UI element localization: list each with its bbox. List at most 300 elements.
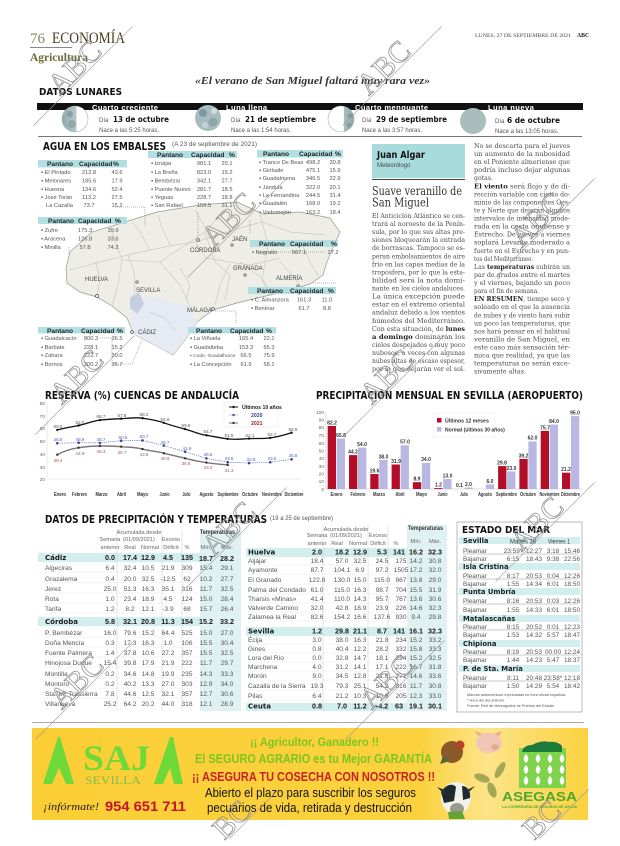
month labels: Septiembre (496, 492, 517, 498)
month labels: Abril (117, 492, 126, 498)
table: Tranco de Beas group: 18.4 (329, 210, 341, 216)
table: Cadiz and Cordoba: 6.4 (105, 565, 115, 572)
table: Iznájar group: ▪ San Rafael (151, 203, 183, 209)
advert slogans: Abierto el plazo para suscribir los seguros (205, 785, 416, 800)
table: Tranco de Beas group: 22.9 (329, 176, 341, 182)
month labels: Febrero (350, 492, 366, 498)
table: Iznájar group: 31.1 (221, 203, 233, 209)
watermark: ABC pattern: ABC (503, 186, 570, 253)
bar chart: 20 (319, 472, 324, 478)
table: Huelva, Sevilla and Ceuta: 0.0 (312, 655, 322, 662)
panel: estado del mar: 20:53 (526, 649, 542, 656)
moon dates: 21 de septiembre (245, 115, 316, 124)
table: Cadiz and Cordoba: 27.2 (162, 650, 175, 657)
series: 2020: 50.5 (119, 435, 128, 440)
table: Huelva reservoirs: 134.6 (82, 187, 96, 193)
article text right column: El viento será flojo y de di- (474, 183, 570, 190)
table: Huelva, Sevilla and Ceuta: 29.8 (335, 626, 349, 636)
heading: datos de precipitacion y temperaturas: (19 a 25 de septiembre) (270, 515, 333, 522)
series: 2020: 32.8 (247, 457, 256, 462)
table: Cadiz and Cordoba: 32.1 (123, 617, 137, 626)
table: Huelva, Sevilla and Ceuta: 12.3 (410, 693, 423, 700)
table: Cadiz and Cordoba: 33.2 (220, 617, 234, 626)
table: Iznájar group: ▪ Puente Nuevo (151, 187, 191, 193)
table: Almanzora group: 61.7 (298, 306, 310, 312)
line chart (40, 401, 304, 498)
table: Cadiz and Cordoba: 25.0 (104, 586, 117, 593)
article text left column: sula, por lo que sus altas pre- (372, 229, 465, 236)
heading: agua en los embalses: AGUA EN LOS EMBALSES (43, 140, 166, 153)
table: La Viñuela group: ▪ La Concepción (190, 362, 232, 368)
table: La Viñuela group: 61.9 (240, 362, 252, 368)
table: Huelva, Sevilla and Ceuta: 21.1 (353, 626, 367, 636)
table: Huelva, Sevilla and Ceuta: 17.2 (410, 567, 423, 574)
page header (30, 30, 589, 64)
table: Cadiz and Cordoba: 19.9 (162, 671, 175, 678)
table: Cadiz and Cordoba: 64.2 (124, 701, 137, 708)
author box (372, 144, 465, 180)
table: Cadiz and Cordoba: 316 (181, 586, 193, 593)
article text right column: gotas. (474, 175, 493, 182)
table: Huelva reservoirs: % (113, 161, 119, 168)
series: 2021: 43.8 (140, 452, 149, 457)
panel: estado del mar: 1:55 (507, 581, 520, 588)
panel: estado del mar: 20:48 (526, 675, 542, 682)
panel: estado del mar: 0:01 (547, 624, 560, 631)
month labels: Diciembre (284, 492, 304, 498)
series: ultimos 10 anos: 59.0 (54, 424, 63, 429)
bar chart (316, 410, 582, 498)
table: Cadiz and Cordoba: 62 (183, 576, 191, 583)
table: Cadiz and Cordoba: 15.5 (200, 650, 213, 657)
black moon band: Luna nueva (488, 103, 535, 112)
series: ultimos 10 anos: 66.7 (97, 414, 106, 419)
table: Huelva reservoirs: ▪ José Torán (41, 195, 72, 201)
bar value labels: 23.0 (507, 466, 517, 472)
bar value labels: 8.9 (414, 476, 421, 482)
panel: estado del mar: Bajamar (463, 632, 488, 639)
series: 2020: 41.8 (183, 446, 192, 451)
table: Cadiz and Cordoba: 79.6 (124, 630, 137, 637)
table: Cadiz and Cordoba: 12.9 (141, 553, 155, 562)
table: Guadalcacín group: 36.5 (111, 336, 123, 342)
bar chart: 100 (316, 410, 324, 416)
column headers: Déficit (370, 541, 386, 547)
table: Iznájar group: ▪ Yeguas (151, 195, 173, 201)
table: Huelva, Sevilla and Ceuta: 15.8 (410, 646, 423, 653)
table: Zufre group (38, 217, 127, 251)
series: 2021: 31.3 (225, 468, 234, 473)
table: Huelva, Sevilla and Ceuta: 224 (395, 655, 407, 662)
table: Huelva, Sevilla and Ceuta: Palma del Condado (248, 587, 306, 594)
icon: moon first quarter (62, 106, 88, 132)
line chart: 70 (40, 414, 45, 420)
series: 2020: 36.5 (204, 452, 213, 457)
table: Cadiz and Cordoba: 29.1 (221, 565, 234, 572)
panel: estado del mar: Pleamar (463, 548, 488, 555)
panel: estado del mar: 18:47 (564, 632, 580, 639)
series: ultimos 10 anos: 56.8 (289, 427, 298, 432)
series: 2021: 39.4 (54, 458, 63, 463)
table: Cadiz and Cordoba: 10.2 (200, 576, 213, 583)
table: Huelva, Sevilla and Ceuta: 32.8 (336, 655, 349, 662)
heading: estado del mar: ESTADO DEL MAR (462, 525, 551, 536)
bar chart: 10 (319, 479, 324, 485)
table: Iznájar group: 823.0 (197, 170, 211, 176)
bar chart: 70 (319, 433, 324, 439)
map of Andalucia: ALMERÍA (276, 275, 302, 282)
table: Cadiz and Cordoba: 222 (181, 660, 193, 667)
table: Cadiz and Cordoba: 525 (181, 630, 193, 637)
table: Zufre group: 126.8 (78, 236, 92, 242)
table: Cadiz and Cordoba: 124 (181, 596, 193, 603)
table: Cadiz and Cordoba: 44.6 (124, 691, 137, 698)
panel: estado del mar: 12:18 (564, 675, 580, 682)
table: Huelva, Sevilla and Ceuta: 32.3 (428, 626, 442, 636)
panel: estado del mar: P. de Sta. María (463, 665, 523, 673)
logo: Asegasa: ASEGASA (502, 789, 578, 804)
table: Huelva, Sevilla and Ceuta: 34.5 (336, 673, 349, 680)
table: Zufre group: 39.9 (107, 228, 119, 234)
series: 2021: 36.6 (182, 461, 191, 466)
table: Cadiz and Cordoba: 11.7 (200, 586, 213, 593)
table: Almanzora group: % (328, 288, 334, 295)
table: Huelva, Sevilla and Ceuta: 4.0 (312, 664, 322, 671)
table: Iznájar group: 20.1 (221, 161, 233, 167)
table: Huelva, Sevilla and Ceuta: 54.2 (376, 683, 389, 690)
table: Cadiz and Cordoba: 13.3 (142, 681, 155, 688)
table: Zufre group: ▪ Aracena (41, 236, 66, 242)
table: Cadiz and Cordoba: 30.6 (221, 691, 234, 698)
table: Cadiz and Cordoba: 51.3 (124, 586, 137, 593)
moon dates: Día (362, 118, 372, 124)
bar value labels: 38.0 (379, 454, 389, 460)
watermark: ABC pattern: ABC (350, 34, 417, 101)
table: Huelva, Sevilla and Ceuta: 316 (395, 683, 407, 690)
bar chart: 40 (319, 456, 324, 462)
table: Cadiz and Cordoba: -12.5 (160, 576, 176, 583)
table: Huelva reservoirs: 113.2 (82, 195, 96, 201)
table: La Viñuela group: % (266, 328, 272, 335)
panel: estado del mar: 15:46 (564, 548, 580, 555)
table: Cadiz and Cordoba: 32.1 (162, 691, 175, 698)
port bands (459, 537, 580, 672)
bar value labels: 75.7 (540, 426, 550, 432)
logo: ASAJA Sevilla (43, 737, 183, 787)
table: Cadiz and Cordoba: 14.8 (142, 671, 155, 678)
table: Cadiz and Cordoba: Fuente Palmera (45, 650, 92, 657)
table: Iznájar group: 228.7 (197, 195, 211, 201)
table: Cadiz and Cordoba: 1.4 (105, 650, 115, 657)
panel: estado del mar: Bajamar (463, 657, 488, 664)
table: Huelva, Sevilla and Ceuta: 32.3 (428, 548, 442, 556)
watermark: ABC pattern: BC (206, 794, 258, 846)
table: La Viñuela group: ▪ Guadalteba (190, 345, 224, 351)
table: Iznájar group: 281.7 (197, 187, 211, 193)
article heading: Suave veranillo de (372, 184, 462, 198)
table: Guadalcacín group: Pantano (47, 328, 73, 335)
table: Negratín (250, 240, 339, 256)
table: Huelva, Sevilla and Ceuta: Marchena (248, 664, 278, 671)
panel: estado del mar: Bajamar (463, 581, 488, 588)
article text right column: Estrecho. De jueves a viernes (474, 232, 570, 239)
table: Huelva, Sevilla and Ceuta: 0.8 (312, 646, 322, 653)
table: Cadiz and Cordoba: 0.0 (105, 553, 115, 562)
table: Cadiz and Cordoba: 17.9 (142, 660, 155, 667)
table: Almanzora group: 11.0 (322, 298, 332, 304)
table: Tranco de Beas group: % (335, 151, 341, 158)
table: Cadiz and Cordoba: 0.2 (105, 681, 115, 688)
article text right column: tos del Mediterráneo. (474, 256, 533, 263)
table: Huelva, Sevilla and Ceuta: 115.0 (334, 587, 350, 594)
table: Cadiz and Cordoba: 28.2 (220, 554, 234, 563)
tide notes: Fuente: Red de Mareógrafos de Puertos del Estado (467, 704, 554, 708)
table: Cadiz and Cordoba: 318 (181, 701, 193, 708)
table: Huelva, Sevilla and Ceuta: 15.5 (410, 587, 423, 594)
panel: bar chart precipitation (316, 389, 583, 498)
table: Cadiz and Cordoba: 68 (183, 606, 191, 613)
series: 2020: 33.5 (225, 456, 234, 461)
moon dates: 6 de octubre (507, 116, 560, 125)
table: Guadalcacín group: 30.0 (111, 353, 123, 359)
table: Cadiz and Cordoba: 106 (181, 640, 193, 647)
bar value labels: 54.0 (357, 442, 367, 448)
moon dates: Nace a las 3:57 horas. (362, 128, 422, 134)
table: Huelva reservoirs: 212.8 (82, 170, 96, 176)
table: Huelva, Sevilla and Ceuta: 16.2 (409, 548, 423, 556)
table: Huelva, Sevilla and Ceuta: 141 (393, 548, 405, 556)
panel: estado del mar: Pleamar (463, 573, 488, 580)
table: Cadiz and Cordoba: 7.8 (105, 691, 115, 698)
table: Huelva, Sevilla and Ceuta: Cazalla de la Sierra (248, 683, 306, 690)
table: Huelva reservoirs: 52.4 (111, 187, 123, 193)
table: Zufre group: Capacidad (78, 218, 111, 225)
table: Cadiz and Cordoba: Grazalema (45, 576, 78, 583)
table: Cadiz and Cordoba: -3.9 (162, 606, 174, 613)
tide notes (467, 693, 566, 708)
article text left column: troposfera, por lo que la esta- (372, 269, 465, 276)
table: Cadiz and Cordoba: 27.0 (221, 630, 234, 637)
table: Almanzora group: Capacidad (290, 288, 323, 295)
legend (433, 413, 505, 437)
table: Cadiz and Cordoba: 1.0 (163, 640, 173, 647)
table: Huelva, Sevilla and Ceuta: 205 (395, 693, 407, 700)
table: Cadiz and Cordoba: Sta. Mª Trassierra (45, 691, 98, 698)
panel: estado del mar: Pleamar (463, 598, 488, 605)
table: Huelva, Sevilla and Ceuta: 12.2 (354, 646, 367, 653)
bar value labels: 82.2 (327, 420, 337, 426)
map of Andalucia: SEVILLA (136, 288, 160, 294)
month labels: Junio (160, 492, 170, 498)
logo: Asegasa: LA CORREDURÍA DE SEGUROS DE ASAJA (502, 804, 577, 809)
table: Huelva, Sevilla and Ceuta: 332 (395, 646, 407, 653)
table: Huelva, Sevilla and Ceuta: 38.0 (336, 637, 349, 644)
table: Cadiz and Cordoba: Hinojosa Duque (45, 660, 92, 667)
icon: moon last quarter (328, 106, 354, 132)
bar value labels: 84.0 (549, 419, 559, 425)
table: Huelva, Sevilla and Ceuta: Pilas (248, 693, 263, 700)
table: Cadiz and Cordoba: 4.5 (163, 553, 173, 562)
table: Cadiz and Cordoba: 64.4 (162, 630, 175, 637)
table: Huelva, Sevilla and Ceuta: Sevilla (248, 628, 275, 636)
advert: ASAJA Sevilla (32, 728, 588, 820)
article text right column: veranillo de San Miguel, en (473, 336, 570, 343)
month labels: Julio (460, 492, 468, 498)
article text right column: en el Poniente almeriense que (474, 159, 570, 166)
article text left column: de borrascas. Tampoco se es- (372, 245, 465, 252)
table: La Viñuela group: 153.3 (239, 345, 253, 351)
series: ultimos 10 anos: 52.7 (268, 432, 277, 437)
table: La Viñuela group: 66.5 (240, 353, 252, 359)
table: Huelva, Sevilla and Ceuta: 32.0 (311, 605, 324, 612)
table: Cadiz and Cordoba: 303 (181, 681, 193, 688)
panel: estado del mar: Chipiona (463, 640, 497, 648)
table: Almanzora group: Pantano (257, 288, 283, 295)
panel: estado del mar: 5:54 (547, 683, 560, 690)
table: Huelva, Sevilla and Ceuta: 32.5 (429, 655, 442, 662)
table: Huelva, Sevilla and Ceuta: 14.6 (410, 605, 423, 612)
table: Cadiz and Cordoba: 21.9 (162, 660, 175, 667)
heading: reserva: RESERVA (%) CUENCAS DE ANDALUCÍA (45, 389, 240, 402)
panel: estado del mar: 6:15 (507, 556, 520, 563)
table: Huelva, Sevilla and Ceuta: 15.2 (410, 655, 423, 662)
watermark: ABC pattern: ABC (503, 490, 570, 557)
table: Cadiz and Cordoba: 37.8 (124, 650, 137, 657)
map of Andalucia: GRANADA (233, 266, 263, 272)
panel: estado del mar: 14:29 (526, 683, 542, 690)
table: Cadiz and Cordoba: 154 (181, 617, 193, 626)
month labels: Octubre (520, 492, 536, 498)
series: 2020: 50.7 (140, 434, 149, 439)
legend: Últimos 10 años (242, 404, 282, 411)
series: 2021 (54, 445, 234, 473)
table: Huelva, Sevilla and Ceuta: 9.4 (411, 614, 421, 621)
table: Cadiz and Cordoba: 20.2 (142, 701, 155, 708)
table: Cadiz and Cordoba: 34.0 (221, 681, 234, 688)
panel: estado del mar: 12:23 (564, 624, 580, 631)
panel: estado del mar: 8:16 (507, 598, 520, 605)
table: Cadiz and Cordoba: 12.1 (142, 606, 155, 613)
table: Cadiz and Cordoba: 26.4 (221, 606, 234, 613)
advert slogans: pecuarios de vida, retirada y destrucción (207, 800, 412, 815)
panel: estado del mar: 12:26 (564, 573, 580, 580)
table: Zufre group: Pantano (48, 218, 74, 225)
table: Huelva, Sevilla and Ceuta: 30.8 (429, 558, 442, 565)
table: Negratín: 27.2 (327, 250, 339, 256)
series: 2020: 46.7 (161, 440, 170, 445)
author box: Juan Algar (376, 150, 425, 161)
table: Cadiz and Cordoba: Montilla (45, 671, 68, 678)
table: Cadiz and Cordoba: 20.8 (141, 617, 155, 626)
table: Huelva, Sevilla and Ceuta: 32.3 (429, 605, 442, 612)
table: Guadalcacín group: ▪ Bornos (41, 362, 63, 368)
table: Huelva, Sevilla and Ceuta: 137.6 (374, 614, 391, 621)
tide notes: Mareas astronómicas expresadas en hora oficial española. (467, 693, 566, 697)
icon: leaves (473, 760, 508, 799)
table: Cadiz and Cordoba: 17.3 (124, 640, 137, 647)
bar chart: 80 (319, 425, 324, 431)
column headers: anterior (101, 545, 120, 551)
black moon band: Cuarto creciente (92, 103, 158, 112)
heading: datos lunares: DATOS LUNARES (39, 87, 122, 98)
table: Huelva, Sevilla and Ceuta: 17.1 (376, 664, 389, 671)
column headers: Normal (349, 541, 367, 547)
table: Huelva, Sevilla and Ceuta: 1505 (394, 567, 409, 574)
month labels: Marzo (96, 492, 108, 498)
table: Tranco de Beas group: 475.1 (306, 168, 320, 174)
legend (224, 402, 282, 427)
article text right column: para el fin de semana. (474, 288, 539, 295)
column headers: Exceso (369, 533, 387, 539)
table: La Viñuela group: 58.1 (263, 362, 275, 368)
article text right column: par de grados entre el martes (474, 272, 570, 279)
table: Tranco de Beas group (257, 150, 343, 216)
series: 2021: 33.2 (204, 465, 213, 470)
table: Huelva, Sevilla and Ceuta: 130.0 (334, 577, 351, 584)
article text right column: intervalos de intensidad mode- (474, 216, 570, 222)
table: Huelva, Sevilla and Ceuta: 31.2 (336, 664, 349, 671)
table: Tranco de Beas group: ▪ Giribaile (259, 168, 283, 174)
article text right column: rada en la costa onubense y (474, 224, 570, 231)
article text right column: EN RESUMEN, tiempo seco y (474, 296, 570, 303)
series: ultimos 10 anos: 52.1 (246, 433, 255, 438)
table: Zufre group: ▪ Zufre (41, 228, 58, 234)
table: Cadiz and Cordoba: Jerez (45, 586, 61, 593)
table: Huelva, Sevilla and Ceuta: 15.0 (354, 577, 367, 584)
series: ultimos 10 anos (54, 412, 298, 440)
month labels (330, 492, 580, 498)
table: Huelva, Sevilla and Ceuta: 271 (395, 673, 407, 680)
article text right column (473, 143, 571, 376)
table: Tranco de Beas group: ▪ Tranco De Beas (259, 160, 304, 166)
table: Zufre group: 175.3 (78, 228, 92, 234)
article text right column: este caso más sensación tér- (474, 344, 570, 352)
table: Cadiz and Cordoba: 16.3 (142, 640, 155, 647)
moon dates: 29 de septiembre (376, 115, 447, 124)
heading: agua en los embalses: (A 23 de septiembre de 2021) (172, 141, 257, 148)
watermark: ABC pattern: ABC (195, 186, 262, 253)
table: Cadiz and Cordoba: 14.3 (200, 671, 213, 678)
legend: 2021 (251, 421, 263, 427)
legend: Normal (últimos 30 años) (445, 428, 505, 434)
table: Iznájar group: % (229, 152, 235, 159)
bar value labels: 1.2 (435, 482, 442, 488)
table: Huelva, Sevilla and Ceuta: 18.1 (376, 655, 389, 662)
table: Huelva, Sevilla and Ceuta: 21.8 (376, 673, 389, 680)
icon: new moon (460, 108, 486, 134)
page header: LUNES, 27 DE SEPTIEMBRE DE 2021 (475, 33, 571, 39)
table: Zufre group: ▪ Minilla (41, 245, 62, 251)
line chart: 30 (40, 465, 45, 471)
series: 2020: 48.7 (97, 437, 106, 442)
table: Huelva, Sevilla and Ceuta: 21.8 (376, 637, 389, 644)
map of Andalucia: JAÉN (232, 236, 247, 243)
panel: estado del mar: 3:18 (547, 548, 560, 555)
column headers: (01/09/2021) (123, 537, 155, 543)
table: Huelva, Sevilla and Ceuta: 14.1 (354, 664, 367, 671)
bar value labels: 0.1 (456, 483, 463, 489)
table: Zufre group: 33.6 (107, 236, 119, 242)
table: Huelva, Sevilla and Ceuta: 3.0 (312, 637, 322, 644)
table: Huelva reservoirs: Pantano (47, 161, 73, 168)
table: Cadiz and Cordoba: 1.0 (105, 596, 115, 603)
column headers: anterior (308, 541, 327, 547)
table: Cadiz and Cordoba: 0.3 (105, 640, 115, 647)
table: Cadiz and Cordoba: 16.3 (142, 586, 155, 593)
panel: estado del mar: 12:27 (526, 548, 542, 555)
map of Andalucia: CÁDIZ (138, 329, 156, 336)
table: Huelva reservoirs: 185.6 (82, 178, 96, 184)
